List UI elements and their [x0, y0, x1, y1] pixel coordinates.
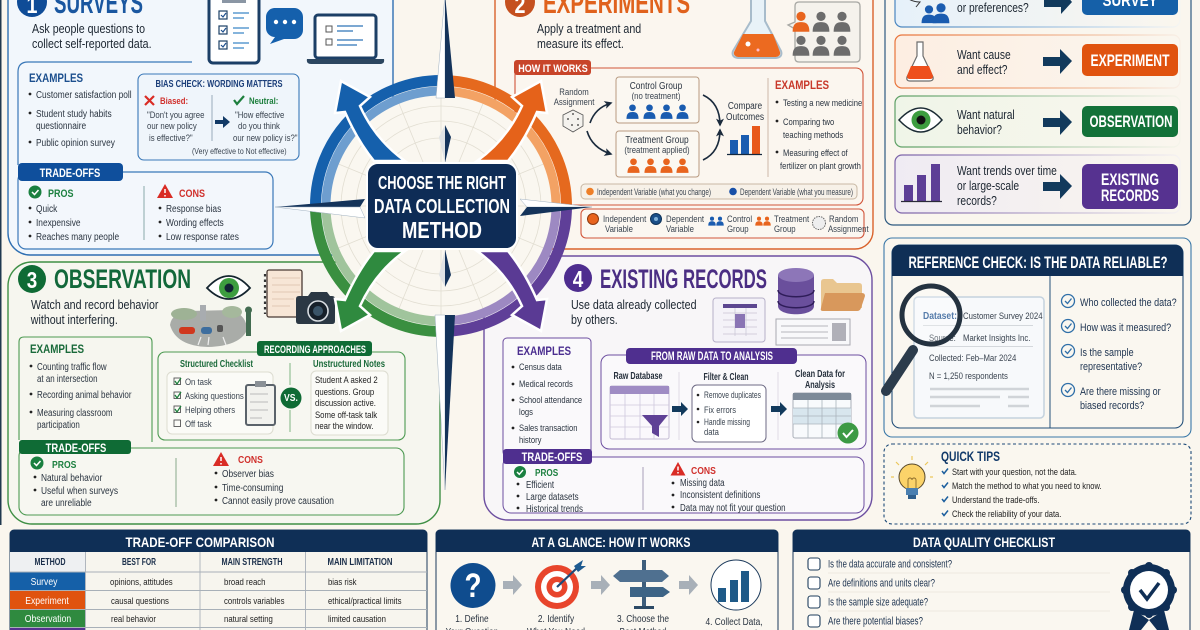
observation description — [30, 297, 158, 327]
trade-offs: observation: Time-consuming — [222, 482, 283, 493]
row: existing records — [895, 155, 1180, 213]
icon legend: Independent — [603, 213, 647, 224]
trade-offs: existing records: Large datasets — [526, 491, 579, 502]
heading: observation: 3 — [27, 268, 37, 293]
examples list — [18, 62, 192, 165]
filter and clean: Filter & Clean — [704, 372, 748, 383]
bias check box: "Don't you agree — [147, 109, 205, 120]
method cells: Experiment — [25, 595, 69, 607]
dataset card: Market Insights Inc. — [963, 332, 1030, 343]
filter and clean: Fix errors — [704, 405, 736, 415]
icon: laptop — [307, 15, 384, 64]
arrow — [591, 575, 610, 595]
dataset card: Collected: Feb–Mar 2024 — [929, 352, 1016, 363]
trade-offs: surveys — [18, 163, 273, 249]
examples: experiments: Comparing two — [783, 116, 835, 127]
reliability questions: representative? — [1080, 361, 1142, 373]
compass dial — [329, 94, 553, 318]
column heads — [34, 557, 392, 568]
step 1 — [446, 563, 498, 630]
table rows: bias risk — [328, 576, 357, 587]
trade-offs: existing records: PROS — [535, 467, 558, 478]
reliability questions: Who collected the data? — [1080, 297, 1177, 309]
bias check box: Biased: — [160, 95, 188, 106]
how it works box: HOW IT WORKS — [518, 63, 588, 75]
structured checklist: Asking questions — [185, 390, 244, 401]
panel: reference check — [884, 238, 1191, 437]
icon: group with one selected — [788, 2, 860, 62]
heading: observation: OBSERVATION — [54, 264, 191, 294]
bias check box: do you think — [238, 120, 281, 131]
checklist items: Is the data accurate and consistent? — [828, 558, 952, 570]
needles — [275, 0, 592, 490]
versus badge: VS. — [284, 392, 298, 404]
examples: experiments: fertilizer on plant growth — [780, 160, 861, 171]
trade-offs: existing records: Efficient — [526, 479, 555, 490]
examples: existing records: Census data — [519, 361, 562, 372]
row: observation: behavior? — [957, 124, 1002, 137]
observation description: Watch and record behavior — [31, 297, 158, 312]
column heads: MAIN STRENGTH — [222, 557, 282, 568]
trade-offs: existing records: Missing data — [680, 477, 725, 488]
records description — [571, 297, 696, 327]
unstructured notes: Student A asked 2 — [315, 374, 378, 385]
icon legend: Control — [727, 213, 752, 224]
reliability questions — [1062, 294, 1177, 412]
examples: existing records: School attendance — [519, 394, 582, 405]
examples: existing records: logs — [519, 406, 533, 417]
central hub: compass wheel — [275, 0, 592, 490]
icon: database — [778, 268, 814, 314]
heading: experiments — [505, 0, 690, 20]
illustration: road scene — [170, 305, 252, 347]
experiment description: Apply a treatment and — [537, 21, 641, 36]
checklist items — [808, 558, 1110, 628]
trade-offs: surveys: Low response rates — [166, 231, 239, 242]
icon: eye — [207, 276, 250, 299]
table rows: causal questions — [111, 595, 170, 606]
table: trade-off comparison — [10, 530, 427, 630]
trade-offs: observation — [19, 440, 404, 515]
step 1: ? — [464, 566, 482, 605]
table rows: limited causation — [328, 613, 386, 624]
arrow: to observation — [335, 251, 405, 331]
filter and clean: Handle missing — [704, 417, 750, 427]
title — [367, 163, 517, 249]
arrow — [679, 575, 698, 595]
table rows: natural setting — [224, 613, 273, 624]
icon: camera — [296, 292, 335, 324]
bias check box: our new policy is?" — [233, 132, 298, 143]
grid — [10, 552, 427, 630]
bias check box — [138, 74, 299, 160]
quick tips list — [941, 449, 1102, 519]
trade-offs: existing records: Historical trends — [526, 503, 583, 514]
row: experiment: and effect? — [957, 64, 1007, 77]
reliability questions: Is the sample — [1080, 347, 1134, 359]
table rows: real behavior — [111, 613, 156, 624]
how it works box: Assignment — [554, 96, 595, 107]
examples: observation: at an intersection — [37, 373, 98, 384]
compare outcomes chart: Compare — [728, 100, 762, 111]
reliability questions: How was it measured? — [1080, 322, 1172, 334]
filter and clean: data — [704, 426, 719, 437]
trade-offs: observation: Useful when surveys — [41, 485, 118, 496]
icon: data table — [713, 298, 765, 342]
heading: observation — [18, 264, 191, 294]
examples: observation: Measuring classroom — [37, 407, 113, 418]
icon: clipboard small — [246, 381, 275, 425]
icon legend: Variable — [666, 223, 694, 234]
row: existing records: records? — [957, 195, 997, 208]
clean data for analysis: Clean Data for — [795, 369, 845, 380]
how it works box: Random — [559, 86, 589, 97]
icon: flask — [733, 0, 781, 58]
row: survey: or preferences? — [957, 2, 1029, 15]
bias check box: Neutral: — [249, 95, 278, 106]
arrow: to existing records — [477, 251, 547, 331]
compare outcomes chart: Outcomes — [726, 111, 764, 122]
unstructured notes: near the window. — [315, 420, 373, 431]
examples: experiments: Testing a new medicine — [783, 97, 862, 108]
how it works box — [514, 60, 863, 205]
icon: magnifying glass — [886, 286, 960, 391]
icon legend — [581, 209, 869, 238]
row: observation — [895, 96, 1180, 147]
dataset card: Customer Survey 2024 — [963, 310, 1043, 321]
icon legend: Group — [774, 223, 796, 234]
raw database: Raw Database — [614, 371, 663, 382]
ring — [316, 80, 566, 332]
filter and clean: Remove duplicates — [704, 390, 761, 400]
row: existing records: or large-scale — [957, 180, 1019, 193]
panel 4: existing records — [484, 256, 872, 520]
control group — [616, 77, 699, 123]
reliability questions: Are there missing or — [1080, 386, 1161, 398]
unstructured notes: discussion active. — [315, 397, 376, 408]
quick tips list: QUICK TIPS — [941, 449, 1000, 464]
trade-offs: existing records: CONS — [691, 465, 716, 477]
experiment description — [537, 21, 641, 51]
icon: quality badge — [1121, 562, 1177, 630]
examples list: questionnaire — [36, 120, 86, 131]
treatment group — [616, 131, 699, 177]
checklist heading — [793, 530, 1190, 552]
step 4: chart: 4. Collect Data, — [705, 616, 763, 627]
examples: observation: Recording animal behavior — [37, 389, 132, 400]
recording approaches: Unstructured Notes — [313, 359, 385, 370]
panel 2: experiments — [495, 0, 873, 249]
step 2 — [527, 560, 586, 630]
dataset card: Dataset: — [923, 310, 957, 322]
method cells: Observation — [25, 613, 71, 625]
control group: (no treatment) — [632, 90, 681, 101]
row: existing records: EXISTING — [1101, 171, 1159, 189]
records description: Use data already collected — [571, 297, 696, 312]
icon legend: Assignment — [828, 223, 869, 234]
examples: experiments — [775, 79, 862, 171]
examples: existing records: Medical records — [519, 378, 573, 389]
icon legend: Random — [829, 213, 858, 224]
examples list: Public opinion survey — [36, 137, 115, 148]
heading: surveys — [17, 0, 143, 20]
row: experiment — [895, 35, 1180, 88]
step 3: signpost — [613, 560, 670, 630]
trade-offs: surveys: Reaches many people — [36, 231, 119, 242]
icon: records sheet — [776, 319, 850, 345]
trade-offs: observation: Observer bias — [222, 468, 274, 479]
method cells: Survey — [31, 576, 58, 588]
heading: existing records — [564, 264, 767, 294]
quick tips list: Start with your question, not the data. — [952, 466, 1077, 477]
unstructured notes: questions. Group — [315, 386, 374, 397]
row: experiment: EXPERIMENT — [1090, 52, 1170, 70]
bias check box: "How effective — [235, 109, 284, 120]
table rows: broad reach — [224, 576, 266, 587]
treatment group: (treatment applied) — [624, 144, 690, 155]
survey description: collect self-reported data. — [32, 36, 152, 51]
survey description: Ask people questions to — [32, 21, 145, 36]
checklist items: Are there potential biases? — [828, 616, 923, 628]
table heading — [10, 530, 427, 552]
bias check box: is effective?" — [149, 132, 193, 143]
arrow: to experiments — [477, 81, 547, 161]
trade-offs: surveys: Inexpensive — [36, 217, 81, 228]
title: CHOOSE THE RIGHT — [378, 173, 506, 193]
examples list: EXAMPLES — [29, 72, 83, 85]
examples: existing records: history — [519, 434, 542, 445]
at a glance heading — [436, 530, 778, 552]
trade-offs: observation: PROS — [52, 459, 77, 471]
from raw data to analysis: FROM RAW DATA TO ANALYSIS — [651, 349, 773, 363]
clean data for analysis: Analysis — [805, 380, 835, 391]
records description: by others. — [571, 312, 618, 327]
filter and clean — [692, 372, 766, 442]
clean data for analysis — [793, 369, 858, 444]
bias check box: BIAS CHECK: WORDING MATTERS — [156, 78, 282, 90]
checklist heading: DATA QUALITY CHECKLIST — [913, 534, 1055, 550]
dataset card — [914, 297, 1044, 418]
examples: experiments: Measuring effect of — [783, 147, 848, 158]
reference heading — [892, 245, 1183, 428]
trade-offs: observation: TRADE-OFFS — [46, 442, 106, 455]
step 2: 2. Identify — [538, 613, 574, 624]
trade-offs: observation: Natural behavior — [41, 472, 102, 483]
checklist items: Are definitions and units clear? — [828, 578, 935, 590]
panel: quick tips — [884, 444, 1191, 524]
table rows: opinions, attitudes — [110, 576, 173, 587]
trade-offs: existing records: Data may not fit your question — [680, 502, 786, 513]
icon legend: Group — [727, 223, 749, 234]
examples list: Student study habits — [36, 108, 112, 119]
step 4: chart — [705, 560, 763, 630]
panel: data quality checklist — [793, 530, 1190, 630]
table rows: ethical/practical limits — [328, 595, 402, 606]
examples: existing records — [503, 338, 591, 456]
table rows — [110, 576, 402, 624]
icon: notebook — [265, 270, 302, 317]
experiment description: measure its effect. — [537, 36, 624, 51]
unstructured notes — [311, 371, 388, 435]
bias check box: (Very effective to Not effective) — [192, 146, 287, 156]
trade-offs: observation: are unreliable — [41, 497, 92, 508]
panel: which method decision guide — [885, 0, 1191, 225]
legend strip: Dependent Variable (what you measure) — [740, 187, 853, 198]
legend strip: Independent Variable (what you change) — [597, 187, 711, 198]
icon: folder — [821, 279, 865, 311]
examples: observation: Counting traffic flow — [37, 361, 107, 372]
raw database — [610, 371, 669, 439]
dataset card: Source: — [929, 332, 956, 343]
heading: existing records: 4 — [573, 267, 584, 292]
checklist items: Is the sample size adequate? — [828, 596, 928, 608]
trade-offs: existing records — [503, 449, 864, 514]
icon: light bulb — [891, 456, 933, 499]
table heading: TRADE-OFF COMPARISON — [126, 534, 274, 550]
table rows: controls variables — [224, 595, 285, 606]
treatment group: Treatment Group — [625, 134, 689, 145]
examples: existing records: EXAMPLES — [517, 345, 571, 358]
at a glance heading: AT A GLANCE: HOW IT WORKS — [532, 534, 690, 550]
trade-offs: surveys: CONS — [179, 188, 205, 200]
structured checklist — [167, 372, 275, 434]
quick tips list: Match the method to what you need to know. — [952, 480, 1102, 491]
quick tips list: Check the reliability of your data. — [952, 508, 1061, 519]
examples: observation — [19, 337, 152, 442]
structured checklist: On task — [185, 376, 212, 387]
heading: existing records: EXISTING RECORDS — [600, 264, 767, 294]
row: survey — [895, 0, 1180, 27]
bias check box: our new policy — [147, 120, 197, 131]
trade-offs: existing records: Inconsistent definitions — [680, 489, 761, 500]
title: DATA COLLECTION — [374, 196, 510, 218]
column heads: BEST FOR — [122, 557, 157, 568]
examples: experiments: EXAMPLES — [775, 79, 829, 92]
from raw data to analysis — [601, 348, 866, 449]
trade-offs: existing records: TRADE-OFFS — [522, 451, 582, 464]
step 1: 1. Define — [455, 613, 489, 624]
icon legend: Dependent — [666, 213, 705, 224]
trade-offs: surveys: Quick — [36, 203, 58, 214]
versus badge — [280, 363, 302, 432]
column heads: METHOD — [34, 557, 66, 568]
arrow: to surveys — [335, 81, 405, 161]
trade-offs: surveys: TRADE-OFFS — [40, 167, 100, 180]
examples list: Customer satisfaction poll — [36, 89, 132, 100]
unstructured notes: Some off-task talk — [315, 409, 378, 420]
structured checklist: Helping others — [185, 404, 236, 415]
icon legend: Variable — [605, 223, 633, 234]
dataset card: N = 1,250 respondents — [929, 370, 1008, 381]
reliability questions: biased records? — [1080, 400, 1144, 412]
arrow — [503, 575, 522, 595]
row: experiment: Want cause — [957, 49, 1011, 62]
row: observation: Want natural — [957, 109, 1015, 122]
trade-offs: observation: Cannot easily prove causation — [222, 495, 334, 506]
legend strip — [581, 184, 857, 199]
trade-offs: surveys: PROS — [48, 188, 74, 200]
column heads: MAIN LIMITATION — [328, 557, 392, 568]
icon: chat bubble — [266, 8, 303, 44]
method cells — [10, 552, 85, 630]
structured checklist: Off task — [185, 418, 212, 429]
trade-offs: surveys: Response bias — [166, 203, 222, 214]
trade-offs: observation: CONS — [238, 454, 263, 466]
quick tips list: Understand the trade-offs. — [952, 494, 1039, 505]
examples: observation: participation — [37, 419, 80, 430]
icon: dice — [563, 110, 583, 132]
row: existing records: Want trends over time — [957, 165, 1057, 178]
panel 1: surveys — [8, 0, 393, 255]
title: METHOD — [402, 217, 482, 243]
panel: at a glance — [436, 530, 778, 630]
examples: experiments: teaching methods — [783, 129, 843, 140]
step 3: signpost: 3. Choose the — [617, 613, 669, 624]
recording approaches: RECORDING APPROACHES — [264, 344, 366, 356]
survey description — [32, 21, 152, 51]
control group: Control Group — [630, 80, 682, 91]
observation description: without interfering. — [30, 312, 118, 327]
row: existing records: RECORDS — [1101, 187, 1159, 205]
icon: clipboard — [209, 0, 259, 63]
examples: existing records: Sales transaction — [519, 422, 578, 433]
compare outcomes chart — [726, 100, 764, 154]
trade-offs: surveys: Wording effects — [166, 217, 224, 228]
recording approaches — [158, 341, 405, 440]
panel 3: observation — [8, 262, 440, 524]
icon legend: Treatment — [774, 213, 810, 224]
recording approaches: Structured Checklist — [180, 359, 253, 370]
examples: observation: EXAMPLES — [30, 343, 84, 356]
